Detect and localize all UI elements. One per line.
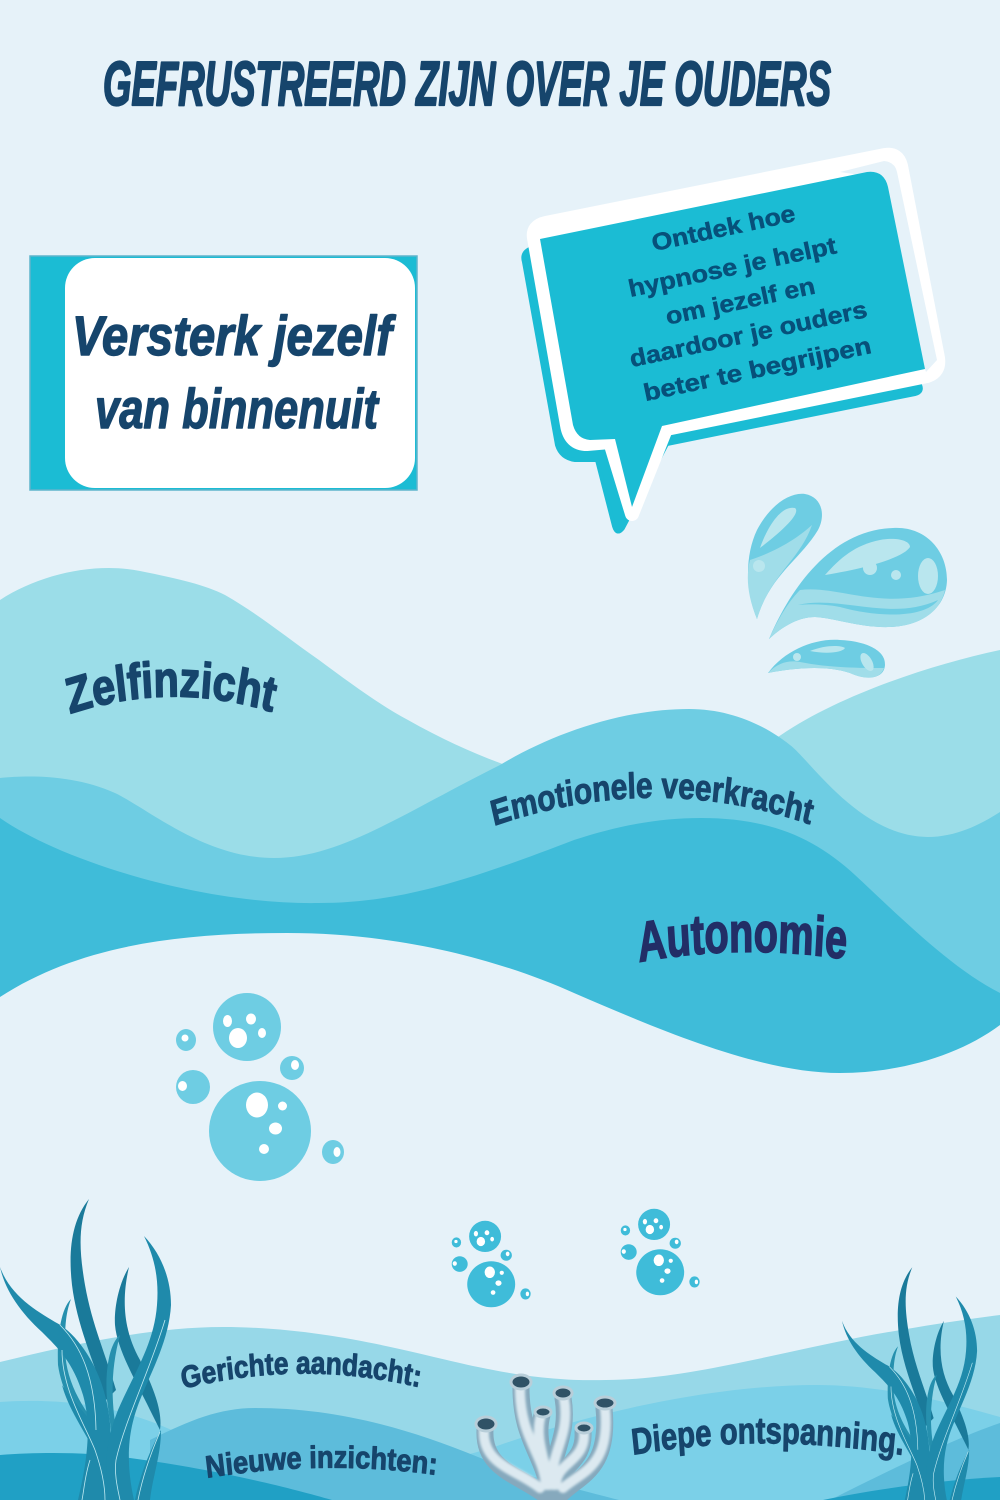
label: Nieuwe inzichten: Nieuwe inzichten: xyxy=(206,1444,436,1478)
callout text: om jezelf en xyxy=(663,273,818,331)
icon: small bubbles right xyxy=(621,1209,700,1295)
icon: large bubbles xyxy=(176,993,344,1181)
seaweed right xyxy=(842,1267,977,1500)
callout text: beter te begrijpen xyxy=(641,332,874,407)
label: Autonomie: Autonomie xyxy=(639,914,846,963)
seaweed left xyxy=(0,1199,171,1500)
label: Zelfinzicht: Zelfinzicht xyxy=(64,660,278,714)
icon: water drops xyxy=(748,494,947,678)
label: Emotionele veerkracht: Emotionele veerkracht xyxy=(490,772,814,826)
waves: sea floor xyxy=(0,1315,1000,1500)
waves: upper sea xyxy=(0,568,1000,1073)
box heading xyxy=(72,304,397,440)
label: Gerichte aandacht: Gerichte aandacht: xyxy=(181,1353,420,1388)
label: Diepe ontspanning: Diepe ontspanning. xyxy=(632,1418,902,1461)
box heading: Versterk jezelf xyxy=(72,304,397,367)
panel: versterk jezelf box xyxy=(30,256,417,490)
callout text: hypnose je helpt xyxy=(626,232,839,303)
callout text: Ontdek hoe xyxy=(649,200,798,257)
icon: sponge coral xyxy=(476,1375,615,1495)
box heading: van binnenuit xyxy=(95,377,380,440)
callout: speech bubble xyxy=(523,155,938,532)
callout text xyxy=(626,200,874,407)
callout text: daardoor je ouders xyxy=(627,296,870,373)
icon: small bubbles left xyxy=(452,1221,531,1307)
